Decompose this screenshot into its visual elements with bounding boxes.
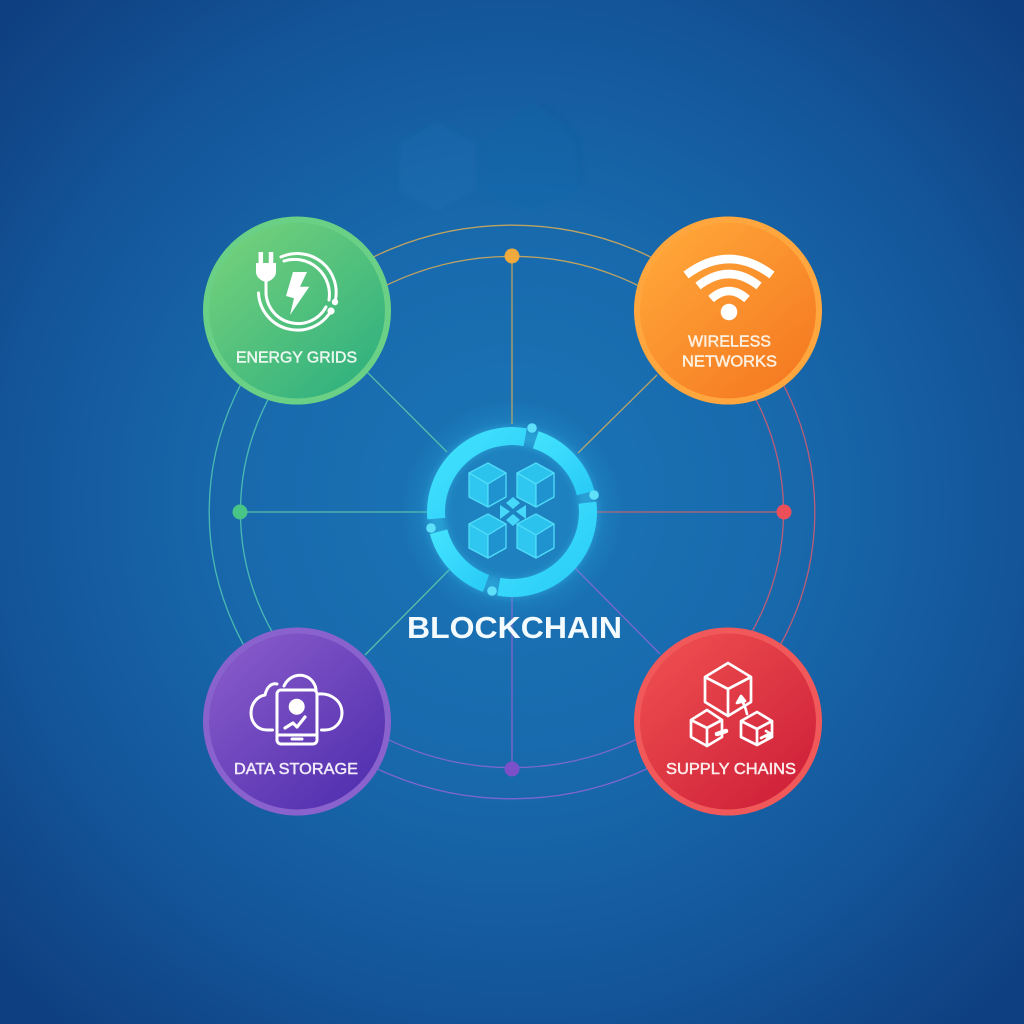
label: NETWORKS bbox=[682, 354, 777, 371]
right connector arcs bbox=[704, 309, 815, 715]
node: supply chains bbox=[634, 628, 822, 816]
bottom connector arcs bbox=[298, 693, 726, 799]
heading: BLOCKCHAIN: BLOCKCHAIN bbox=[407, 610, 622, 645]
node dot: left bbox=[232, 504, 248, 520]
network rings and spokes bbox=[209, 225, 815, 799]
label: DATA STORAGE bbox=[234, 761, 358, 778]
cube: top left bbox=[469, 463, 506, 507]
icon: plug with power ring bbox=[256, 252, 338, 330]
left connector arcs bbox=[209, 309, 320, 715]
ring dots bbox=[426, 423, 599, 596]
cube: bottom left bbox=[469, 514, 506, 558]
label: SUPPLY CHAINS bbox=[666, 761, 796, 778]
top connector arcs bbox=[298, 225, 726, 331]
cube: bottom right bbox=[517, 514, 554, 558]
node dot: right bbox=[776, 504, 792, 520]
ring glow bbox=[436, 436, 588, 588]
central blockchain emblem bbox=[400, 400, 624, 624]
icon: cloud and phone bbox=[251, 675, 342, 744]
segmented ring bbox=[436, 436, 588, 588]
label: WIRELESS bbox=[688, 334, 771, 351]
node: energy grids bbox=[203, 216, 391, 404]
center diamonds bbox=[500, 497, 526, 526]
icon: boxes with arrows bbox=[691, 663, 772, 746]
node: data storage bbox=[203, 628, 391, 816]
node: wireless networks bbox=[634, 216, 822, 404]
node dot: bottom bbox=[504, 762, 520, 776]
node dot: top bbox=[504, 248, 520, 264]
icon: wifi bbox=[686, 259, 772, 320]
cube: top right bbox=[517, 463, 554, 507]
label: ENERGY GRIDS bbox=[236, 350, 357, 367]
faint background hexagons bbox=[399, 103, 582, 215]
spokes bbox=[240, 256, 784, 769]
